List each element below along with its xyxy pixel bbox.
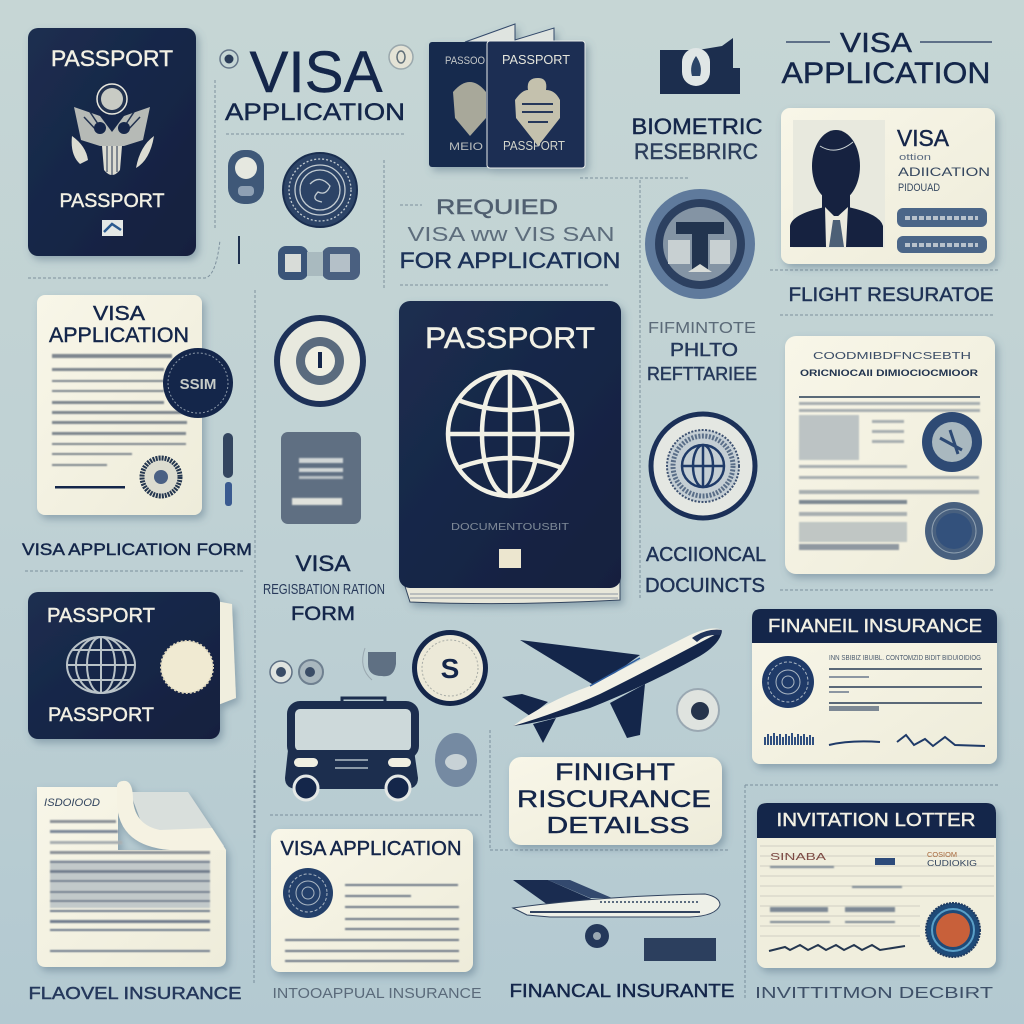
icon: round seal (283, 153, 357, 227)
passport card bottom left (28, 592, 236, 739)
financial insurance card (752, 609, 997, 764)
icon: target dial (274, 315, 366, 407)
heading: visa application left (225, 40, 405, 126)
document card right (785, 336, 995, 574)
heading: required visa: REQUIED (436, 196, 558, 219)
icon: airplane small (513, 880, 720, 961)
footer labels: FLAOVEL INSURANCE (28, 983, 242, 1003)
label: additional documents (645, 544, 766, 597)
heading: visa application left: VISA (250, 40, 383, 105)
heading: flight: FLIGHT RESURATOE (788, 284, 994, 306)
visa profile card (781, 108, 995, 264)
central passport: PASSPORT (425, 322, 595, 355)
label: photo requirement (647, 320, 757, 384)
heading: visa application right: VISA (840, 27, 912, 58)
central passport (399, 301, 621, 604)
label: photo requirement: REFTTARIEE (647, 364, 757, 384)
icon: person silhouette (790, 130, 883, 247)
invitation letter card: INVITATION LOTTER (776, 810, 976, 830)
label: photo requirement: FIFMINTOTE (648, 320, 756, 337)
visa application form card: VISA (93, 303, 146, 325)
heading: required visa (400, 196, 620, 273)
folded document: ISDOIOOD (44, 797, 100, 809)
passport card bottom left: PASSPORT (48, 704, 154, 726)
folded document (37, 781, 226, 967)
heading: visa application left: APPLICATION (225, 99, 405, 126)
invitation letter card: COSIOM (927, 852, 957, 859)
visa profile card: PIDOUAD (898, 182, 940, 194)
footer labels (28, 980, 993, 1003)
icon: small seal top (220, 45, 413, 69)
financial insurance card: FINANEIL INSURANCE (768, 616, 982, 636)
icon: airplane large (502, 628, 722, 743)
invitation letter card: SINABA (770, 852, 826, 863)
icon: dollar coin: S (441, 653, 459, 684)
label: additional documents: ACCIIONCAL (646, 544, 766, 566)
icon: camera (660, 38, 740, 94)
heading: biometric (632, 114, 763, 164)
passport card bottom left: PASSPORT (47, 605, 155, 627)
visa application form card: APPLICATION (49, 324, 189, 347)
icon: printer form (281, 432, 361, 524)
passport card top left: PASSPORT (60, 191, 165, 212)
financial insurance card: INN SBIBIZ IBUIBL. CONTOMZID BIDIT BIDUIOIDIOG (829, 653, 981, 662)
small icons row (270, 648, 396, 684)
icon: stamp (163, 348, 233, 418)
label: visa registration form: FORM (291, 604, 355, 625)
icon: open passports: PASSPORT (503, 139, 565, 153)
icon: globe seal (651, 414, 755, 518)
label: flight insurance details: FINIGHT (555, 759, 675, 786)
visa application small card: VISA APPLICATION (280, 837, 462, 860)
visa application form card: SSIM (180, 376, 216, 393)
invitation letter card: CUDIOKIG (927, 859, 977, 868)
icon: small round (677, 689, 719, 731)
visa profile card: VISA (897, 125, 950, 151)
heading: required visa: VISA ww VIS SAN (408, 224, 614, 246)
invitation letter card (757, 803, 996, 968)
fold flap (117, 781, 226, 850)
heading: visa application right (782, 27, 992, 90)
document card right: COODMIBDFNCSEBTH (813, 350, 971, 362)
label: flight insurance details (509, 757, 722, 845)
footer labels: INTOOAPPUAL INSURANCE (272, 985, 482, 1002)
visa application form card (37, 295, 233, 515)
heading: visa application right: APPLICATION (782, 57, 990, 90)
passport card top left: PASSPORT (51, 46, 173, 71)
heading: biometric: BIOMETRIC (632, 114, 763, 139)
footer labels: INVITTITMON DECBIRT (755, 985, 993, 1002)
label: visa registration form: VISA (296, 551, 351, 576)
icon: biometric disc (645, 189, 755, 299)
label: flight insurance details: RISCURANCE (517, 786, 711, 813)
visa profile card: ottion (899, 152, 931, 162)
icon: bus (285, 698, 418, 800)
icon: eagle emblem (72, 84, 154, 175)
label: photo requirement: PHLTO (670, 340, 738, 360)
footer labels: FINANCAL INSURANTE (510, 980, 734, 1001)
icon: open passports: MEIO (449, 141, 484, 153)
label: visa registration form: REGISBATION RATION (263, 582, 385, 598)
document card right: ORICNIOCAII DIMIOCIOCMIOOR (800, 368, 979, 378)
label: visa registration form (263, 551, 385, 625)
small icons column (228, 150, 360, 280)
icon: dollar coin (412, 630, 488, 706)
icon: open passports (429, 24, 585, 168)
icon: globe (448, 372, 572, 496)
icon: open passports: PASSOO (445, 55, 485, 67)
visa application small card (271, 829, 473, 972)
central passport: DOCUMENTOUSBIT (451, 522, 569, 533)
heading: required visa: FOR APPLICATION (400, 248, 620, 273)
label: flight insurance details: DETAILSS (546, 812, 690, 838)
icon: open passports: PASSPORT (502, 53, 570, 67)
label: visa application form: VISA APPLICATION FORM (22, 540, 252, 559)
passport card top left (28, 28, 196, 256)
icon: small badge (435, 733, 477, 787)
heading: biometric: RESEBRIRC (634, 139, 758, 164)
label: additional documents: DOCUINCTS (645, 575, 765, 597)
visa profile card: ADIICATION (898, 165, 990, 179)
